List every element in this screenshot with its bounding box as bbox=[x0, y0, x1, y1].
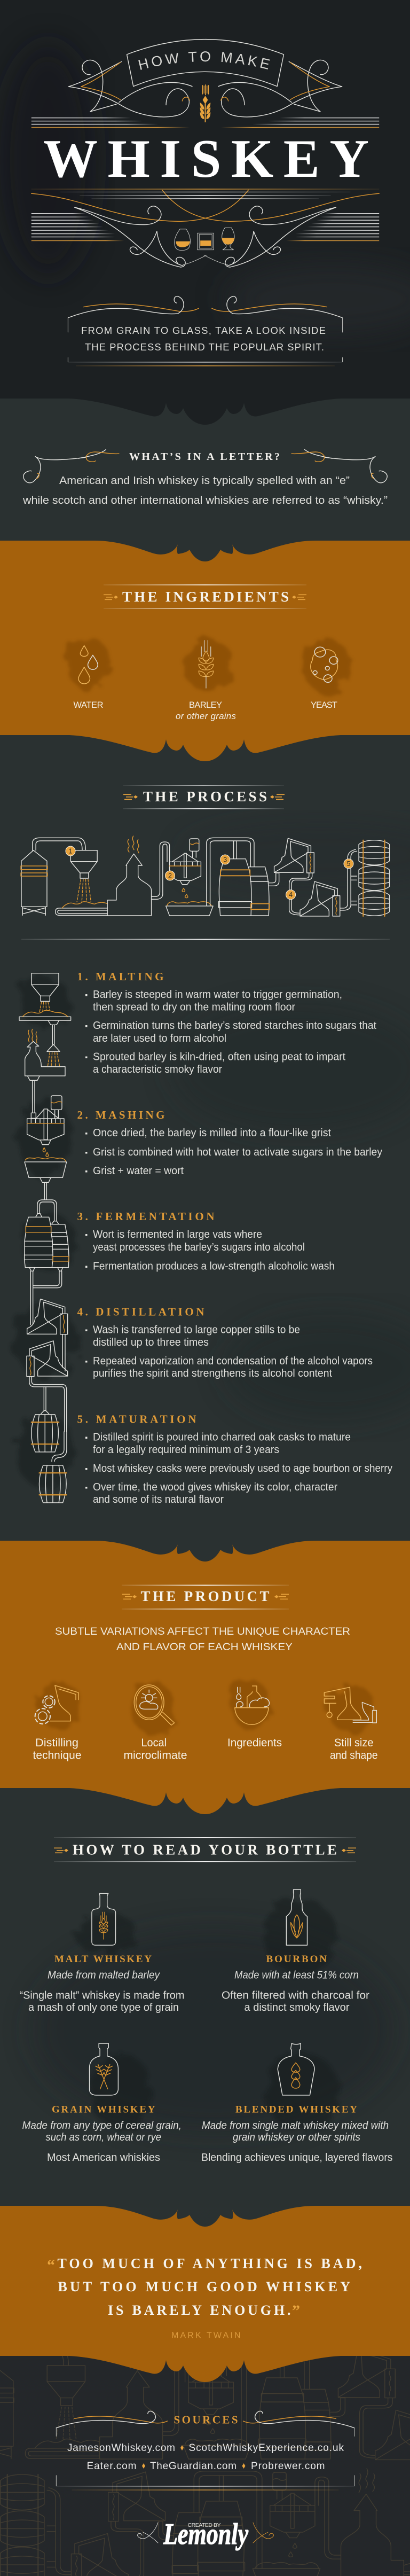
bottle: bourbon bbox=[286, 1890, 308, 1945]
grain whiskey text: such as corn, wheat or rye bbox=[46, 2132, 161, 2143]
panel: the product bbox=[33, 1584, 378, 1762]
product labels: Ingredients bbox=[227, 1737, 282, 1749]
step 5 maturation: Distilled spirit is poured into charred oak casks to mature bbox=[93, 1432, 351, 1443]
icon: still size and shape bbox=[324, 1687, 376, 1723]
heading: how to read your bottle bbox=[54, 1837, 356, 1862]
tagline: THE PROCESS BEHIND THE POPULAR SPIRIT. bbox=[85, 341, 324, 353]
step 1 malting bbox=[77, 970, 376, 1075]
hopper and floor bbox=[56, 850, 107, 915]
process diagram: 2 bbox=[168, 872, 172, 879]
orange band: ingredients bbox=[0, 540, 410, 761]
panel: how to read your bottle bbox=[19, 1837, 393, 2164]
divider lines bbox=[31, 189, 379, 199]
silo bbox=[21, 838, 85, 915]
barrels bbox=[340, 840, 390, 916]
step markers bbox=[66, 846, 353, 900]
icon: ingredients bbox=[235, 1686, 269, 1724]
blended whiskey text: Made from single malt whiskey mixed with bbox=[202, 2120, 389, 2132]
flourish left bbox=[56, 2411, 167, 2486]
product labels: and shape bbox=[330, 1749, 378, 1762]
step 5 maturation bbox=[77, 1412, 392, 1505]
vats bbox=[207, 838, 279, 916]
step 2 mashing: 2. MASHING bbox=[77, 1109, 164, 1121]
heading: the ingredients: THE INGREDIENTS bbox=[122, 589, 289, 605]
step 3 fermentation: Fermentation produces a low-strength alcoholic wash bbox=[93, 1261, 335, 1273]
step 5 maturation: for a legally required minimum of 3 years bbox=[93, 1444, 279, 1456]
heading: how to read your bottle: HOW TO READ YOUR BOTTLE bbox=[73, 1842, 337, 1858]
step 1 malting: Germination turns the barley’s stored starches into sugars that bbox=[93, 1020, 376, 1032]
source list: TheGuardian.com bbox=[150, 2461, 236, 2472]
heading: the ingredients bbox=[104, 584, 306, 609]
heading: the product: THE PRODUCT bbox=[141, 1588, 269, 1604]
step 4 distillation bbox=[77, 1306, 373, 1379]
step 2 mashing bbox=[77, 1109, 382, 1177]
header bottom edge shape bbox=[69, 398, 341, 425]
ingredient labels: WATER bbox=[74, 700, 104, 710]
quote text bbox=[47, 2255, 362, 2320]
grain whiskey text: Most American whiskies bbox=[47, 2152, 160, 2164]
panel: sources bbox=[56, 2411, 354, 2491]
malt whiskey text: Made from malted barley bbox=[48, 1969, 160, 1981]
intro text: SUBTLE VARIATIONS AFFECT THE UNIQUE CHARACTER bbox=[55, 1626, 350, 1637]
source list bbox=[67, 2442, 344, 2472]
quote text: TOO MUCH OF ANYTHING IS BAD, bbox=[58, 2255, 362, 2271]
step 4 distillation: purifies the spirit and strengthens its alcohol content bbox=[93, 1368, 332, 1379]
bourbon text: a distinct smoky flavor bbox=[245, 2002, 350, 2013]
process diagram: 5 bbox=[347, 860, 351, 868]
heading: the process bbox=[123, 785, 285, 809]
step 4 distillation: Repeated vaporization and condensation of the alcohol vapors bbox=[93, 1355, 373, 1367]
icon: water bbox=[78, 646, 98, 684]
bourbon text: Often filtered with charcoal for bbox=[222, 1989, 369, 2001]
heading: SOURCES bbox=[174, 2414, 238, 2426]
step 1 malting: are later used to form alcohol bbox=[93, 1033, 226, 1044]
ingredient labels: or other grains bbox=[176, 711, 236, 721]
body text bbox=[22, 475, 388, 506]
malt whiskey text: MALT WHISKEY bbox=[54, 1954, 152, 1965]
body text: American and Irish whiskey is typically spelled with an “e” bbox=[59, 475, 350, 487]
quote text: BUT TOO MUCH GOOD WHISKEY bbox=[58, 2279, 350, 2294]
panel: the ingredients bbox=[66, 584, 351, 721]
step 1 malting: Sprouted barley is kiln-dried, often using peat to impart bbox=[93, 1051, 345, 1063]
intro text: AND FLAVOR OF EACH WHISKEY bbox=[116, 1642, 293, 1653]
divider bbox=[21, 939, 390, 940]
ink stains bbox=[13, 976, 77, 1488]
blended whiskey text: Blending achieves unique, layered flavors bbox=[201, 2152, 393, 2164]
grain whiskey text bbox=[22, 2104, 182, 2164]
bottle: blended whiskey bbox=[278, 2043, 314, 2095]
tagline frame bottom bbox=[68, 362, 343, 366]
bourbon text: Made with at least 51% corn bbox=[234, 1969, 359, 1981]
bottle: grain whiskey bbox=[90, 2043, 118, 2095]
ink stains bbox=[38, 1681, 375, 1734]
quote text: IS BARELY ENOUGH. bbox=[108, 2302, 290, 2318]
attribution: MARK TWAIN bbox=[171, 2331, 240, 2340]
blended whiskey text: grain whiskey or other spirits bbox=[233, 2132, 360, 2143]
step 2 mashing: Once dried, the barley is milled into a flour-like grist bbox=[93, 1127, 331, 1139]
icon: distilling technique bbox=[35, 1685, 78, 1724]
malt whiskey text: “Single malt” whiskey is made from bbox=[19, 1989, 185, 2001]
step 3 fermentation: Wort is fermented in large vats where bbox=[93, 1229, 262, 1240]
bourbon text: BOURBON bbox=[266, 1954, 327, 1965]
step 1 malting: 1. MALTING bbox=[77, 970, 163, 983]
step 4 distillation: 4. DISTILLATION bbox=[77, 1306, 204, 1318]
distillation column bbox=[27, 1299, 68, 1432]
step 4 distillation: distilled up to three times bbox=[93, 1337, 209, 1348]
bottle: malt whiskey bbox=[92, 1893, 115, 1945]
logo: Lemonly: Lemonly bbox=[163, 2518, 249, 2551]
icon: local microclimate bbox=[134, 1685, 175, 1725]
ingredient labels: BARLEY bbox=[189, 700, 222, 710]
panel: process steps text bbox=[77, 970, 392, 1505]
grain whiskey text: GRAIN WHISKEY bbox=[52, 2104, 155, 2116]
process diagram: 4 bbox=[289, 891, 293, 899]
title ornament bbox=[31, 38, 380, 366]
mashing column bbox=[25, 1096, 67, 1186]
source list: Eater.com bbox=[86, 2461, 137, 2472]
bourbon text bbox=[222, 1954, 369, 2013]
process diagram: 1 bbox=[69, 847, 73, 855]
step 4 distillation: Wash is transferred to large copper stills to be bbox=[93, 1324, 300, 1336]
orange band: product bbox=[0, 1540, 410, 1814]
scroll ribbon left half bbox=[31, 60, 248, 362]
ink stains bbox=[66, 638, 351, 692]
flourish left bbox=[23, 450, 119, 483]
blended whiskey text: BLENDED WHISKEY bbox=[235, 2104, 357, 2116]
product labels: Distilling bbox=[35, 1737, 78, 1749]
logo: Lemonly: CREATED BY bbox=[188, 2522, 221, 2528]
product labels: microclimate bbox=[124, 1749, 187, 1762]
step 1 malting: Barley is steeped in warm water to trigger germination, bbox=[93, 989, 342, 1001]
step 3 fermentation: 3. FERMENTATION bbox=[77, 1210, 215, 1223]
heading: the product bbox=[122, 1584, 289, 1610]
step 2 mashing: Grist + water = wort bbox=[93, 1165, 184, 1177]
icon: wheat bbox=[200, 84, 210, 122]
step 5 maturation: 5. MATURATION bbox=[77, 1412, 196, 1425]
ingredient labels: YEAST bbox=[311, 700, 337, 710]
product labels: Still size bbox=[334, 1737, 374, 1749]
step 5 maturation: Over time, the wood gives whiskey its color, character bbox=[93, 1481, 337, 1493]
step 2 mashing: Grist is combined with hot water to activate sugars in the barley bbox=[93, 1146, 382, 1158]
tagline: FROM GRAIN TO GLASS, TAKE A LOOK INSIDE bbox=[81, 325, 326, 336]
icon: barley bbox=[199, 641, 214, 688]
banner title: HOW TO MAKE bbox=[138, 51, 270, 70]
malting column bbox=[19, 973, 71, 1118]
icon: yeast bbox=[311, 647, 338, 682]
blended whiskey text bbox=[201, 2104, 393, 2164]
step 5 maturation: Most whiskey casks were previously used to age bourbon or sherry bbox=[93, 1463, 392, 1474]
intro text bbox=[55, 1626, 350, 1653]
quote text: ” bbox=[292, 2302, 300, 2320]
malt whiskey text: a mash of only one type of grain bbox=[28, 2002, 179, 2013]
source list: Probrewer.com bbox=[251, 2461, 325, 2472]
kiln bbox=[107, 836, 170, 916]
maturation column bbox=[31, 1415, 67, 1503]
heading: WHAT’S IN A LETTER? bbox=[129, 451, 280, 463]
source list: ScotchWhiskyExperience.co.uk bbox=[189, 2442, 344, 2454]
source list: JamesonWhiskey.com bbox=[67, 2442, 175, 2454]
stills bbox=[274, 838, 340, 916]
quote text: “ bbox=[47, 2257, 55, 2274]
panel: process steps illustration bbox=[13, 973, 77, 1503]
step 3 fermentation: yeast processes the barley’s sugars into alcohol bbox=[93, 1242, 305, 1253]
product labels: technique bbox=[33, 1749, 81, 1762]
step 1 malting: a characteristic smoky flavor bbox=[93, 1064, 222, 1075]
ink stains bbox=[74, 1899, 339, 2132]
ingredient labels bbox=[74, 700, 337, 721]
banner bbox=[127, 40, 283, 87]
orange band: quote bbox=[0, 2205, 410, 2382]
malt whiskey text bbox=[19, 1954, 185, 2013]
product labels bbox=[33, 1737, 378, 1762]
mash tun bbox=[166, 839, 213, 916]
step 5 maturation: and some of its natural flavor bbox=[93, 1494, 224, 1505]
step 1 malting: then spread to dry on the malting room floor bbox=[93, 1001, 295, 1013]
body text: while scotch and other international whiskies are referred to as “whisky.” bbox=[22, 495, 388, 506]
main title: WHISKEY bbox=[43, 129, 369, 189]
process diagram: 3 bbox=[223, 856, 227, 863]
panel: quote bbox=[47, 2255, 362, 2340]
product labels: Local bbox=[141, 1737, 167, 1749]
fermentation column bbox=[25, 1182, 69, 1325]
step 3 fermentation bbox=[77, 1210, 335, 1273]
grain whiskey text: Made from any type of cereal grain, bbox=[22, 2120, 182, 2132]
panel: what's in a letter bbox=[22, 450, 388, 506]
footer ghost line art bbox=[0, 2345, 410, 2576]
icon: glasses bbox=[175, 228, 234, 251]
tagline bbox=[81, 325, 326, 353]
heading: the process: THE PROCESS bbox=[143, 789, 267, 805]
process diagram bbox=[21, 836, 390, 916]
